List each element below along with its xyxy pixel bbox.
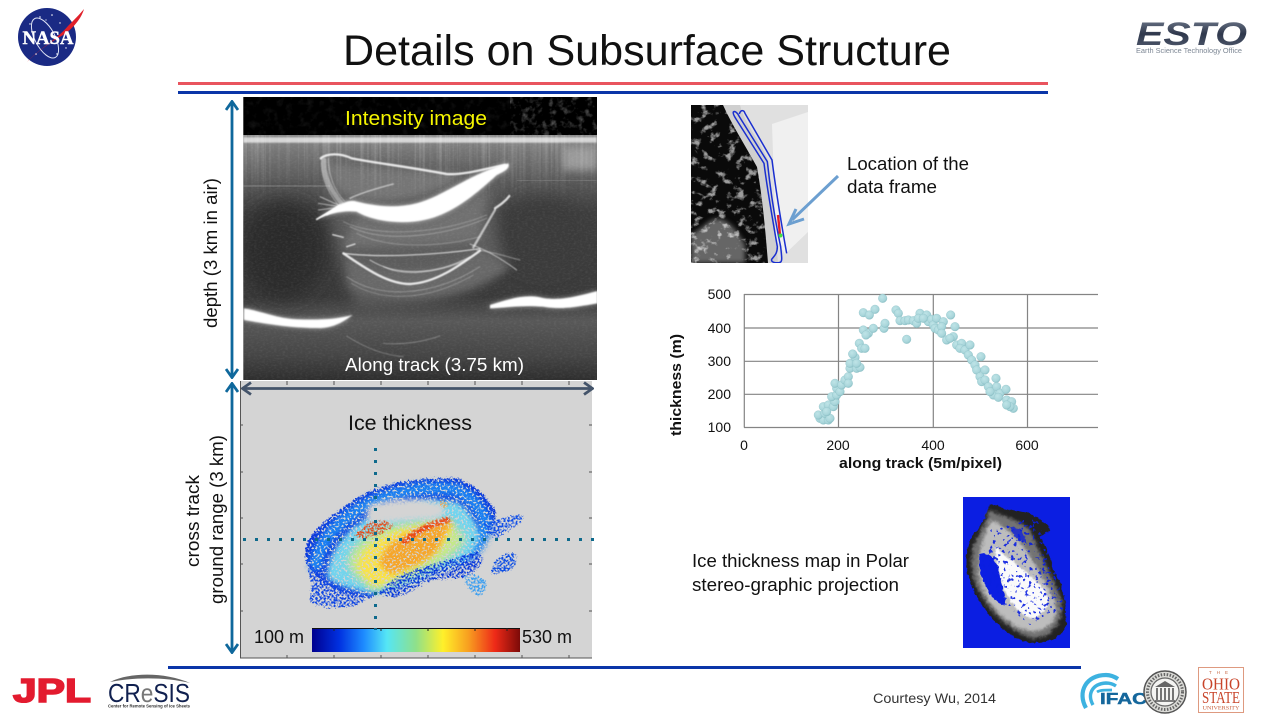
icon: IFAC logo <box>1083 675 1148 708</box>
x axis tick labels: 200 <box>826 437 850 453</box>
label: depth: depth (3 km in air) <box>201 178 221 328</box>
panel: ice thickness map <box>240 381 592 658</box>
text: location of the data frame: Location of the <box>847 154 969 174</box>
y axis tick labels <box>708 286 731 435</box>
x axis tick labels <box>740 437 1039 453</box>
icon: ESTO logo: Earth Science Technology Office <box>1136 46 1242 55</box>
chart: thickness vs along track <box>669 286 1098 472</box>
label: colour bar minimum: 100 m <box>254 627 304 647</box>
label: cross track: cross track <box>183 474 203 567</box>
icon: CReSIS logo: CReSIS <box>108 678 190 708</box>
y axis tick labels: 500 <box>708 286 731 302</box>
arrow: depth extent <box>231 101 233 378</box>
panel: polar stereographic map <box>963 497 1070 648</box>
chart: thickness scatter <box>305 478 496 598</box>
y axis tick labels: 400 <box>708 320 731 336</box>
label: along track: Along track (3.75 km) <box>345 355 524 375</box>
text: courtesy: Courtesy Wu, 2014 <box>873 691 997 706</box>
y axis tick labels: 100 <box>708 419 731 435</box>
icon: Ohio State logo: OHIO <box>1202 674 1240 694</box>
x axis tick labels: 0 <box>740 437 748 453</box>
label: ice thickness: Ice thickness <box>348 412 472 435</box>
panel: radar intensity image <box>240 97 597 380</box>
icon: IFAC logo: IFAC <box>1100 691 1148 708</box>
icon: NASA logo: NASA <box>22 28 74 49</box>
text: location of the data frame: data frame <box>847 177 937 197</box>
icon: NASA logo <box>18 8 84 66</box>
text: location of the data frame <box>847 154 969 197</box>
icon: Ohio State logo: THE <box>1209 670 1233 675</box>
text: polar stereographic description: stereo-graphic projection <box>692 575 899 595</box>
x axis tick labels: 400 <box>921 437 945 453</box>
x axis tick labels: 600 <box>1015 437 1039 453</box>
dotted cross-hair lines <box>243 448 596 630</box>
x axis title: along track (5m/pixel) <box>839 456 1002 472</box>
title: Details on Subsurface Structure <box>343 27 951 75</box>
arrow: to data frame <box>789 176 838 224</box>
text: polar stereographic description <box>692 551 909 595</box>
panel: location map <box>691 105 808 263</box>
icon: ESTO logo: ESTO <box>1136 16 1247 52</box>
icon: JPL logo: JPL <box>13 672 91 709</box>
arrow: cross-track extent <box>231 383 233 653</box>
icon: CReSIS logo: Center for Remote Sensing of Ice Sheets <box>108 704 190 710</box>
icon: Ohio State logo: UNIVERSITY <box>1202 706 1240 712</box>
chart: thickness scatter sparse areas <box>307 498 525 607</box>
label: intensity image: Intensity image <box>345 108 487 130</box>
text: polar stereographic description: Ice thickness map in Polar <box>692 551 909 571</box>
arrow: along-track extent <box>242 387 593 390</box>
icon: Ohio State logo <box>1198 668 1244 712</box>
label: colour bar maximum: 530 m <box>522 627 572 647</box>
legend: colour bar <box>312 628 520 652</box>
y axis tick labels: 300 <box>708 353 731 369</box>
label: ground range: ground range (3 km) <box>207 435 227 604</box>
y axis tick labels: 200 <box>708 386 731 402</box>
y axis title: thickness (m) <box>669 334 685 436</box>
icon: Ohio State logo: STATE <box>1202 688 1240 707</box>
icon: university seal <box>1144 671 1186 713</box>
